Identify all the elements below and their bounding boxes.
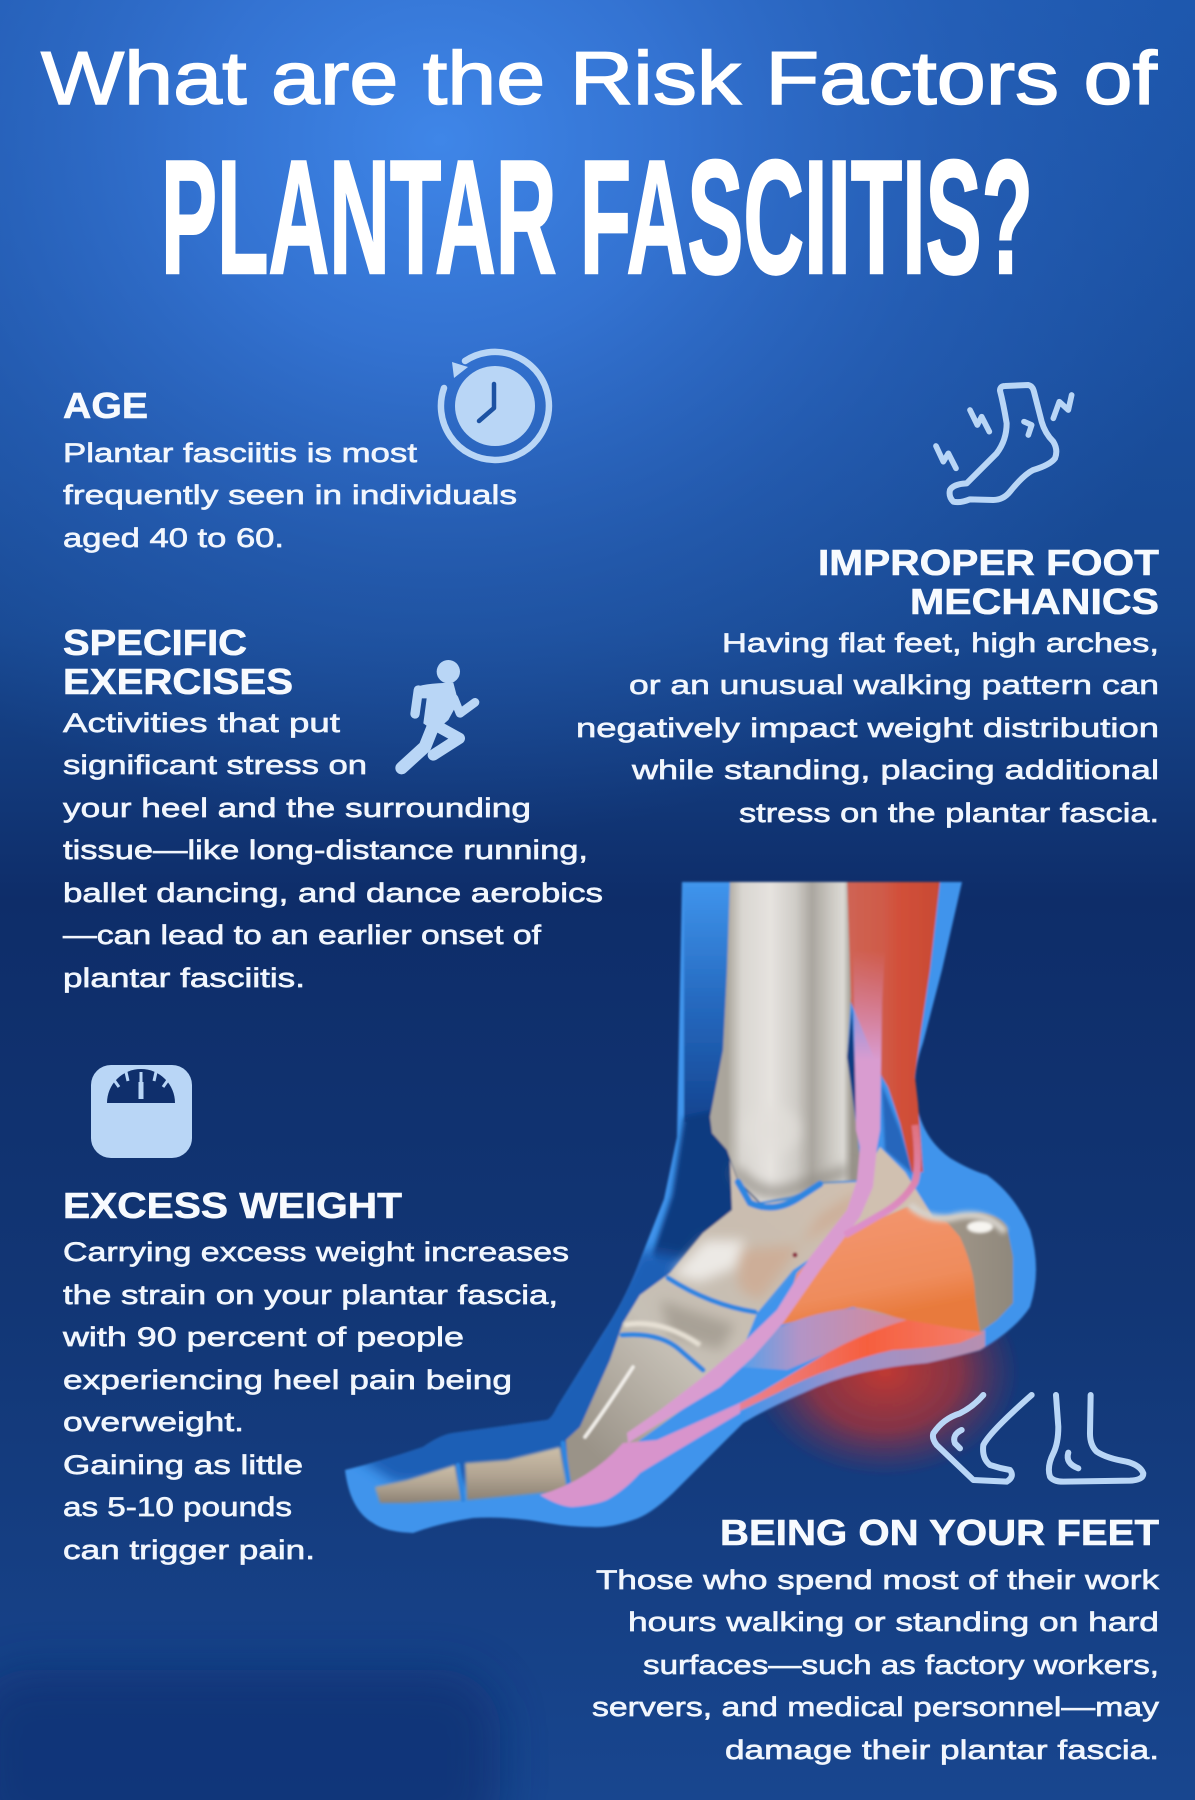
text: specific exercises: your heel and the surrounding (63, 793, 531, 823)
heel pain glow (750, 1267, 1020, 1477)
foot anatomy illustration (330, 870, 1050, 1550)
heel highlight (967, 1221, 993, 1233)
text: being on your feet: servers, and medical personnel—may (592, 1692, 1160, 1722)
pink thin tendon (845, 1125, 918, 1235)
text: excess weight: can trigger pain. (63, 1535, 315, 1565)
panel: excess weight (62, 1065, 569, 1565)
metatarsal shaft highlight (585, 1367, 633, 1437)
text: being on your feet: hours walking or standing on hard (628, 1607, 1159, 1637)
text: excess weight: Carrying excess weight increases (63, 1237, 569, 1267)
text: age: aged 40 to 60. (63, 523, 284, 553)
inner ankle shading (652, 1100, 760, 1270)
gap between bones (847, 1008, 857, 1127)
text: specific exercises: ballet dancing, and dance aerobics (63, 878, 603, 908)
text: specific exercises: plantar fasciitis. (63, 963, 305, 993)
mid-foot tan tint (735, 1190, 860, 1300)
heading: excess weight: EXCESS WEIGHT (63, 1185, 402, 1226)
text: improper foot mechanics (576, 628, 1159, 828)
tibia and fibula (710, 882, 862, 1202)
text: specific exercises: Activities that put (63, 708, 341, 738)
cuneiform shade (660, 1300, 735, 1350)
navicular highlight (672, 1240, 745, 1282)
joint lines (458, 1182, 820, 1500)
text: excess weight: as 5-10 pounds (63, 1492, 292, 1522)
text: improper foot mechanics: stress on the plantar fascia. (739, 798, 1159, 828)
text: specific exercises: —can lead to an earlier onset of (63, 920, 542, 950)
lavender arch (740, 1308, 907, 1370)
mid-foot bones (566, 1147, 933, 1492)
metatarsal head highlight (624, 1324, 700, 1345)
toe bones (375, 1447, 568, 1503)
panel: being on your feet (592, 1395, 1160, 1765)
text: excess weight: Gaining as little (63, 1450, 303, 1480)
text: being on your feet: Those who spend most of their work (596, 1565, 1160, 1595)
heel upper light edge (910, 1205, 1005, 1232)
small dark mark (792, 1252, 798, 1258)
text: age (63, 438, 517, 553)
text: excess weight: overweight. (63, 1407, 244, 1437)
lower pink wedge (540, 1403, 740, 1507)
title line one: What are the Risk Factors of (41, 36, 1157, 120)
icon: runner (402, 660, 475, 768)
under-heel band (749, 1329, 987, 1418)
pink main fascia band (627, 950, 885, 1443)
forefoot upper band (330, 1250, 700, 1482)
text: age: frequently seen in individuals (63, 480, 517, 510)
panel: improper foot mechanics (576, 385, 1159, 828)
text: being on your feet: surfaces—such as factory workers, (643, 1650, 1159, 1680)
heading: specific exercises: EXERCISES (63, 661, 293, 702)
heading: being on your feet: BEING ON YOUR FEET (720, 1512, 1159, 1553)
text: excess weight: experiencing heel pain being (63, 1365, 512, 1395)
heel bone (780, 1207, 1013, 1332)
heading: improper foot mechanics: MECHANICS (910, 581, 1159, 622)
panel: specific exercises (63, 622, 603, 993)
text: excess weight: with 90 percent of people (62, 1322, 464, 1352)
tibia lower highlight (744, 1106, 800, 1154)
text: age: Plantar fasciitis is most (63, 438, 418, 468)
heading: specific exercises (63, 622, 293, 702)
foot silhouette (330, 870, 1050, 1550)
text: excess weight (62, 1237, 569, 1565)
tibia lower shading (735, 1170, 850, 1192)
text: specific exercises: significant stress on (63, 750, 367, 780)
red muscle (847, 882, 940, 1172)
heading: specific exercises: SPECIFIC (63, 622, 247, 663)
blue gap between fascia and tendon (882, 1085, 914, 1175)
heading: improper foot mechanics (818, 542, 1159, 622)
text: excess weight: the strain on your plantar fascia, (63, 1280, 558, 1310)
icon: weight scale (91, 1065, 192, 1158)
inflamed heel area (780, 1207, 980, 1332)
text: being on your feet: damage their plantar fascia. (725, 1735, 1159, 1765)
title (41, 36, 1157, 308)
text: being on your feet (592, 1565, 1160, 1765)
text: specific exercises (63, 708, 603, 993)
text: improper foot mechanics: Having flat feet, high arches, (722, 628, 1159, 658)
text: improper foot mechanics: negatively impact weight distribution (576, 713, 1159, 743)
text: improper foot mechanics: or an unusual walking pattern can (629, 670, 1159, 700)
panel: age (63, 352, 549, 553)
leg shading (682, 906, 729, 1122)
plantar fascia red (687, 1320, 983, 1430)
heading: age: AGE (63, 385, 148, 426)
icon: aching foot (936, 385, 1072, 502)
text: improper foot mechanics: while standing, placing additional (631, 755, 1159, 785)
text: specific exercises: tissue—like long-distance running, (63, 835, 588, 865)
heading: improper foot mechanics: IMPROPER FOOT (818, 542, 1159, 583)
icon: two feet (933, 1395, 1143, 1482)
icon: clock (441, 352, 549, 460)
